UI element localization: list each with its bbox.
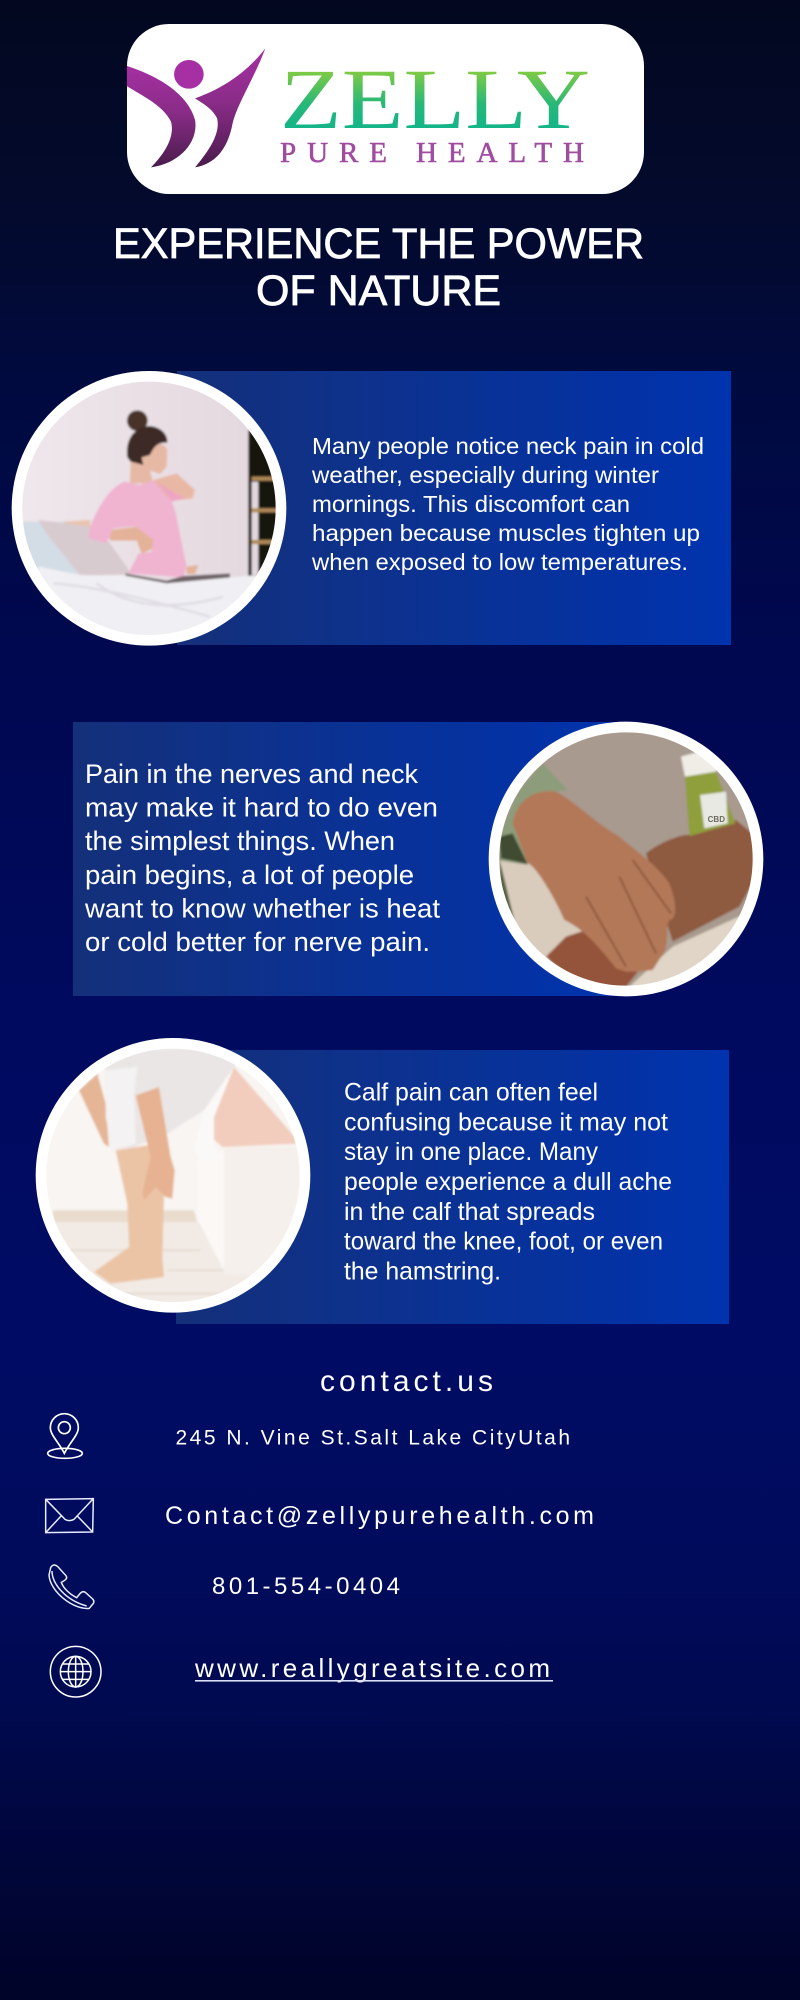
- contact row: website: [50, 1646, 553, 1697]
- panel text: pain begins, a lot of people: [85, 860, 414, 890]
- contact row: address: [48, 1414, 570, 1458]
- photo: woman with neck pain: [10, 370, 290, 650]
- panel text: toward the knee, foot, or even: [344, 1228, 663, 1256]
- panel text: may make it hard to do even: [85, 793, 438, 823]
- bottle label: CBD: [708, 815, 725, 824]
- panel text: the simplest things. When: [85, 826, 395, 856]
- panel text: when exposed to low temperatures.: [311, 549, 688, 575]
- address text: 245 N. Vine St.Salt Lake CityUtah: [176, 1426, 570, 1450]
- photo: person holding calf: [34, 1037, 314, 1317]
- logo card: [127, 24, 644, 194]
- title: [113, 220, 644, 315]
- contact row: phone: [49, 1565, 400, 1608]
- icon: telephone handset: [49, 1565, 94, 1608]
- panel text: weather, especially during winter: [311, 462, 659, 488]
- icon: location pin: [48, 1414, 82, 1458]
- contact row: email: [46, 1499, 594, 1533]
- website link: www.reallygreatsite.com: [194, 1653, 550, 1683]
- panel text: confusing because it may not: [344, 1108, 668, 1136]
- panel background: [73, 722, 626, 996]
- panel text: happen because muscles tighten up: [312, 520, 700, 546]
- panel text: Pain in the nerves and neck: [85, 759, 418, 789]
- panel text: Many people notice neck pain in cold: [312, 433, 704, 459]
- panel text: mornings. This discomfort can: [312, 491, 630, 517]
- panel text: Calf pain can often feel: [344, 1079, 598, 1107]
- title: EXPERIENCE THE POWER: [113, 220, 644, 268]
- logo mark: figure with raised arms: [127, 48, 265, 167]
- panel: calf pain: [34, 1037, 729, 1324]
- logo tagline: PURE HEALTH: [280, 137, 584, 169]
- panel background: [176, 1050, 729, 1324]
- panel text: [84, 759, 440, 957]
- panel text: in the calf that spreads: [344, 1198, 595, 1226]
- panel text: [344, 1079, 672, 1285]
- panel text: [311, 433, 704, 575]
- phone number: 801-554-0404: [212, 1573, 400, 1600]
- panel: nerve pain: [73, 720, 766, 1000]
- logo wordmark: ZELLY: [280, 51, 590, 147]
- panel: neck pain: [10, 370, 731, 650]
- icon: envelope: [46, 1499, 93, 1533]
- panel text: want to know whether is heat: [84, 894, 440, 924]
- panel text: stay in one place. Many: [344, 1138, 598, 1166]
- photo: hands and CBD bottle: [486, 720, 766, 1000]
- website underline: [195, 1680, 553, 1682]
- panel text: the hamstring.: [344, 1257, 501, 1285]
- panel background: [177, 371, 731, 645]
- email text: Contact@zellypurehealth.com: [165, 1502, 594, 1530]
- contact heading: contact.us: [320, 1365, 493, 1398]
- panel text: or cold better for nerve pain.: [85, 927, 430, 957]
- panel text: people experience a dull ache: [344, 1168, 672, 1196]
- title: OF NATURE: [256, 267, 501, 315]
- icon: globe in circle: [50, 1646, 101, 1697]
